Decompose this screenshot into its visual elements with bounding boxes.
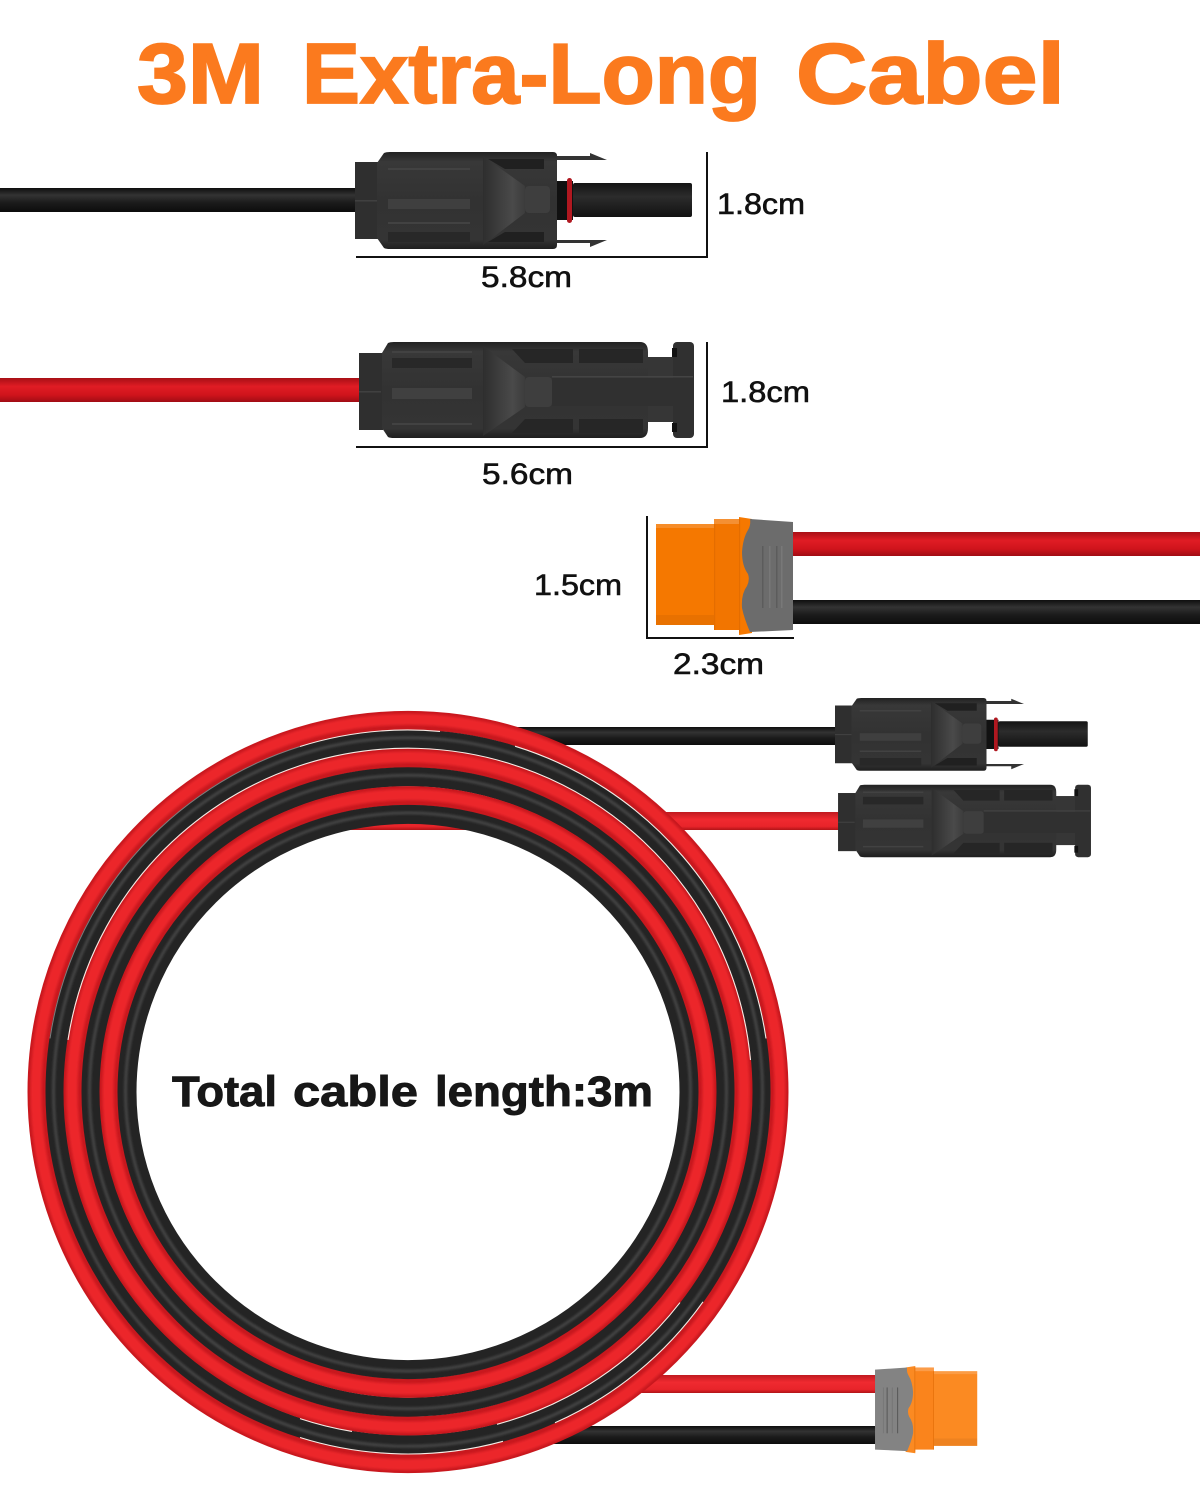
small orange connector [875,1366,977,1453]
dimension lines: female connector [356,342,708,448]
small female connector [838,785,1091,857]
title: Cabel [796,27,1065,122]
coil centre label: length:3m [435,1068,653,1116]
label: male height: 1.8cm [717,188,805,221]
female connector with red cable [0,342,694,438]
cable coil shading [36,719,780,1465]
label: orange connector height: 1.5cm [534,569,622,602]
label: female length: 5.6cm [482,458,573,491]
label: female height: 1.8cm [721,376,810,409]
coiled cable assembly [36,698,1091,1465]
cable tails [345,727,878,1444]
coil centre label: cable [293,1068,418,1116]
title [137,27,1065,122]
dimension lines: orange connector [647,516,794,638]
male connector with black cable [0,152,692,249]
title: 3M [137,27,264,122]
label: male length: 5.8cm [481,261,572,294]
coil centre label: Total [172,1068,277,1116]
small male connector [835,698,1088,771]
dimension lines: male connector [356,152,708,258]
label: orange connector length: 2.3cm [673,648,764,681]
cable coil rings [37,720,779,1464]
orange connector with red and black cables [656,517,1200,635]
coil centre label [172,1068,653,1116]
title: Extra-Long [302,27,761,122]
